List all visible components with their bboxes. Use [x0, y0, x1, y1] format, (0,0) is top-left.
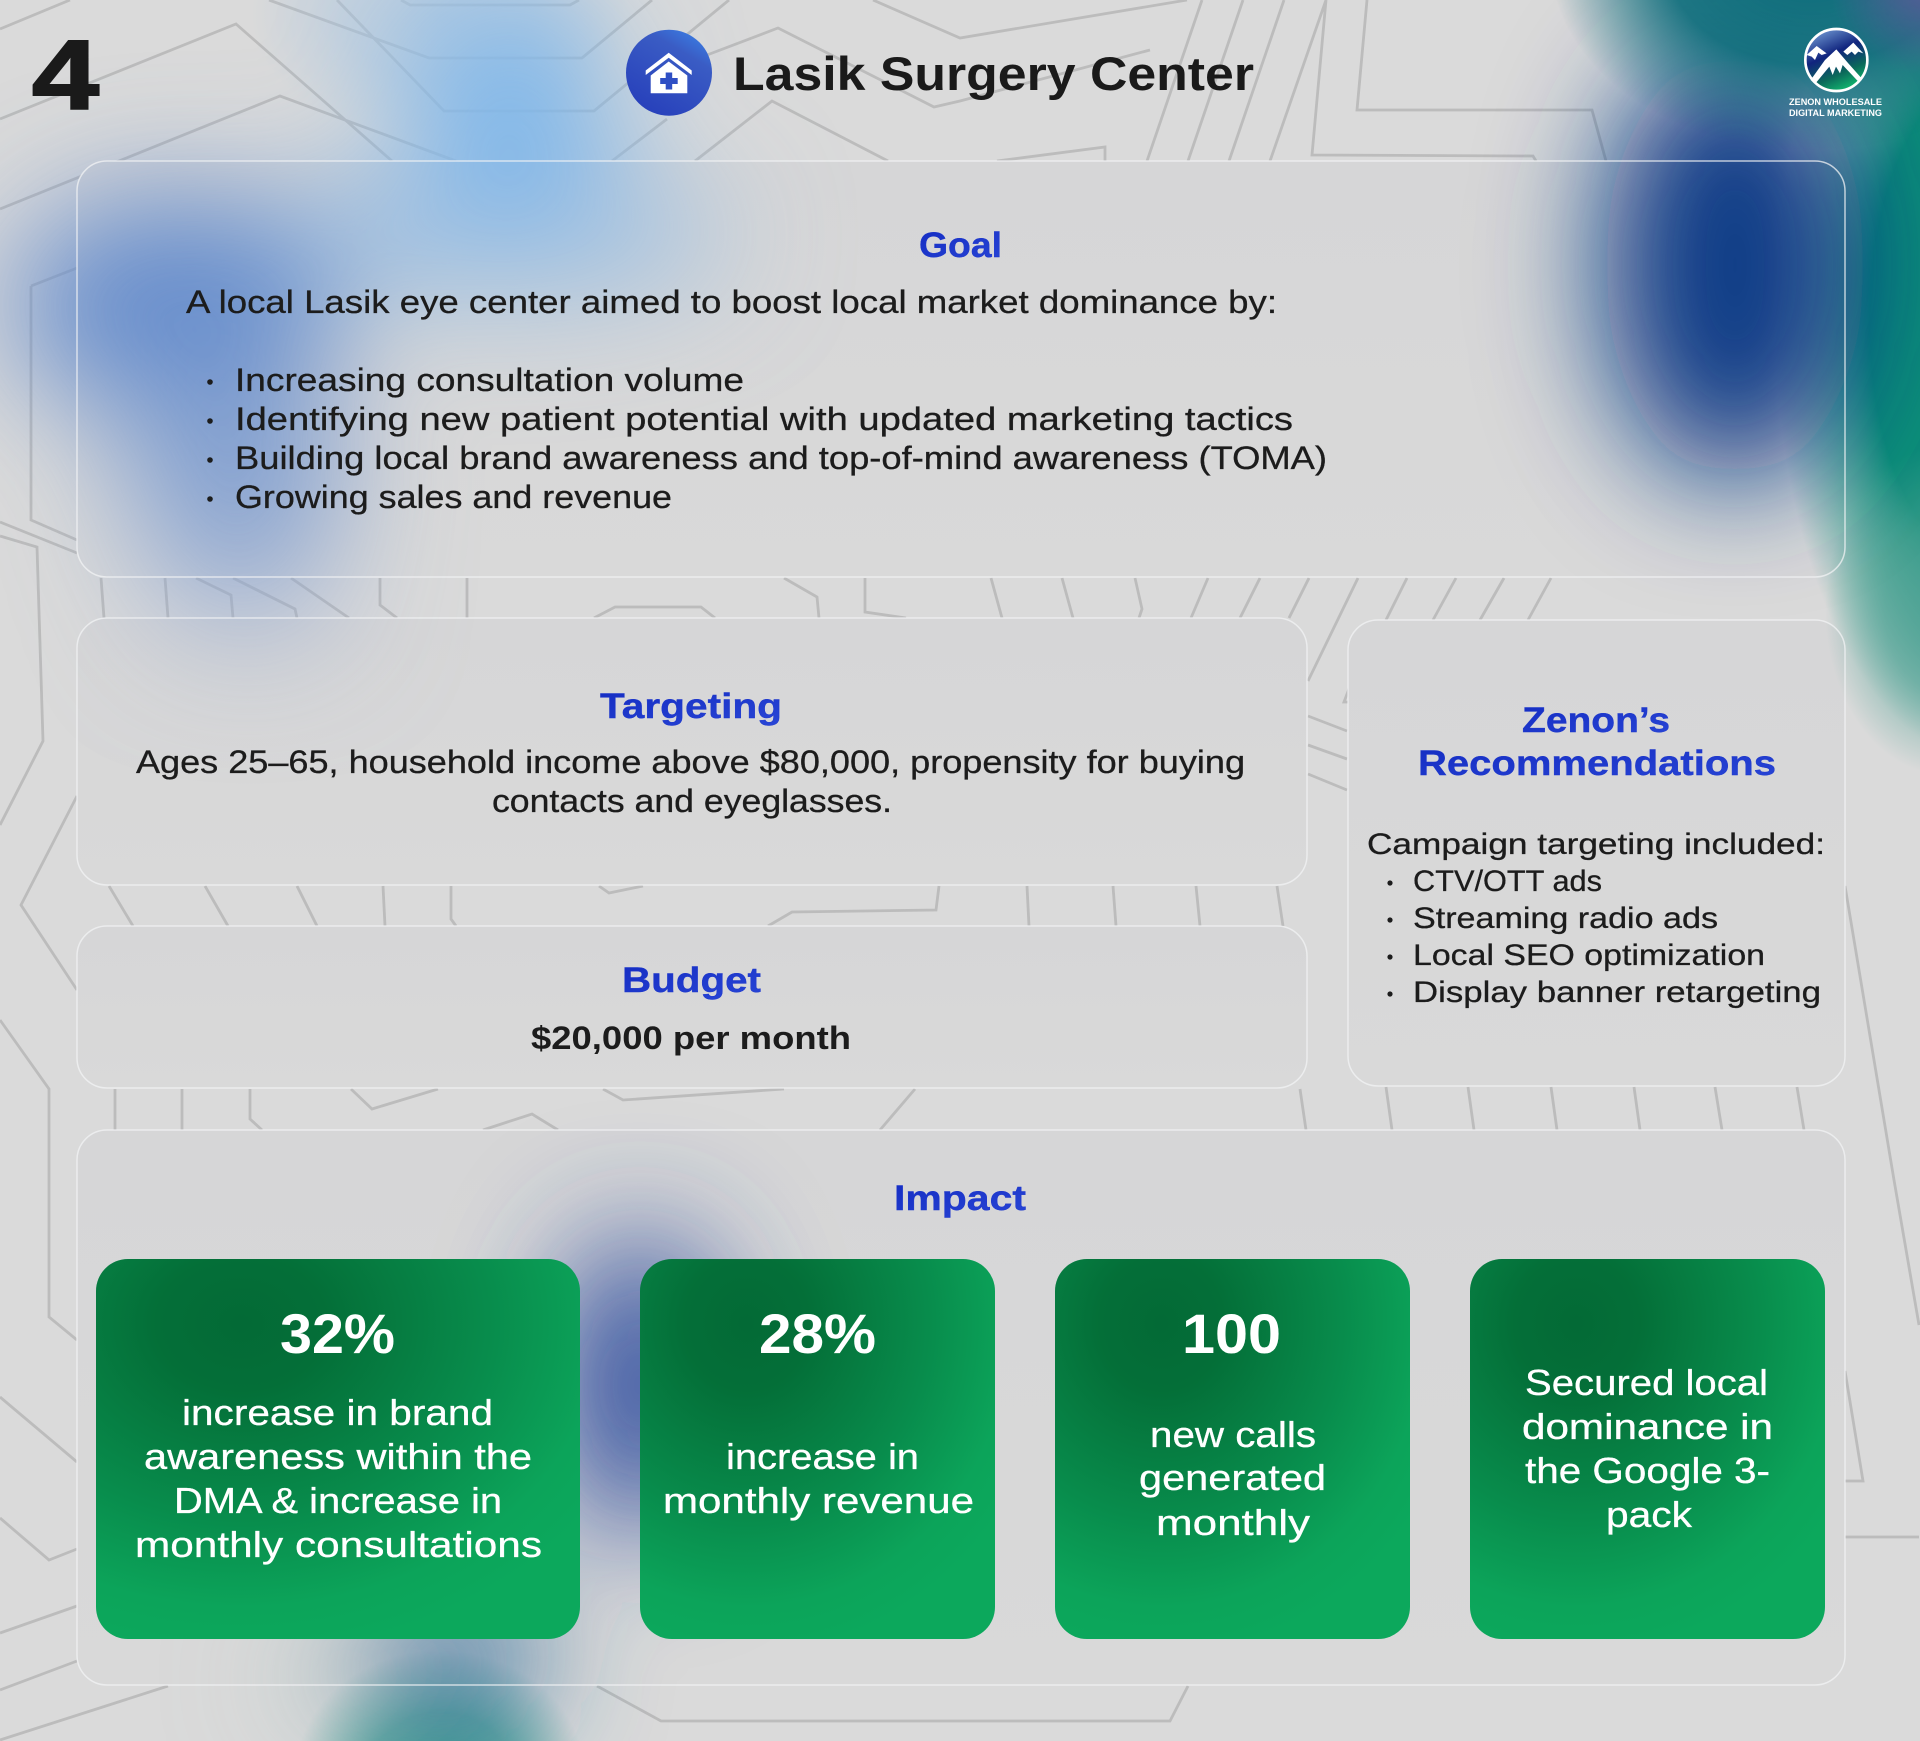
panel: Zenon's recommendations: [1348, 620, 1845, 1086]
card: 100 new calls: generated: [1139, 1457, 1326, 1498]
card: 100 new calls: [1055, 1259, 1410, 1639]
panel: goal: [77, 161, 1845, 577]
header: icon and title: [626, 30, 1254, 116]
card: Google 3-pack: dominance in: [1522, 1406, 1773, 1447]
card: Google 3-pack: Secured local: [1525, 1362, 1768, 1403]
heading: budget: Budget: [622, 961, 761, 1000]
card: 28% monthly revenue: increase in: [726, 1436, 919, 1477]
text: targeting description: contacts and eyeglasses.: [492, 783, 892, 819]
logo: Zenon Wholesale Digital Marketing: DIGITAL MARKETING: [1789, 108, 1882, 119]
card: 28% monthly revenue: monthly revenue: [663, 1480, 974, 1521]
card: 32% brand awareness: monthly consultations: [135, 1524, 542, 1565]
list: campaign channels: Streaming radio ads: [1413, 902, 1718, 935]
card: 32% brand awareness: DMA & increase in: [174, 1480, 502, 1521]
list: campaign channels: Local SEO optimization: [1413, 939, 1765, 972]
title: Lasik Surgery Center: [733, 47, 1254, 100]
list: goal bullets: [207, 362, 1327, 515]
list: goal bullets: Growing sales and revenue: [235, 479, 672, 515]
card: 28% monthly revenue: [640, 1259, 995, 1639]
text: campaign intro: Campaign targeting included:: [1367, 828, 1825, 861]
big step number: 4: [32, 20, 99, 130]
text: targeting description: [136, 744, 1245, 819]
card: 32% brand awareness: awareness within the: [144, 1436, 532, 1477]
icon: medical house: [626, 30, 712, 116]
heading: Zenon's recommendations: Recommendations: [1418, 744, 1776, 783]
list: goal bullets: Building local brand awareness and top-of-mind awareness (TOMA): [235, 440, 1327, 476]
text: goal intro: A local Lasik eye center aimed to boost local market dominance by:: [186, 284, 1277, 320]
list: campaign channels: [1387, 865, 1821, 1009]
card: 32% brand awareness: 32%: [280, 1302, 395, 1365]
heading: goal: Goal: [919, 226, 1002, 265]
card: 100 new calls: new calls: [1150, 1414, 1316, 1455]
card: 100 new calls: monthly: [1156, 1502, 1310, 1543]
list: goal bullets: Identifying new patient potential with updated marketing tactics: [235, 401, 1293, 437]
card: 32% brand awareness: [96, 1259, 580, 1639]
panel: targeting: [77, 618, 1307, 885]
card: Google 3-pack: pack: [1606, 1494, 1693, 1535]
logo: Zenon Wholesale Digital Marketing: [1789, 29, 1882, 119]
list: goal bullets: Increasing consultation volume: [235, 362, 744, 398]
text: budget amount: $20,000 per month: [531, 1020, 851, 1056]
text: targeting description: Ages 25–65, household income above $80,000, propensity for buying: [136, 744, 1245, 780]
list: campaign channels: CTV/OTT ads: [1413, 865, 1602, 898]
card: 100 new calls: 100: [1182, 1302, 1281, 1365]
heading: targeting: Targeting: [600, 687, 782, 726]
card: Google 3-pack: [1470, 1259, 1825, 1639]
heading: Zenon's recommendations: [1418, 701, 1776, 783]
card: 32% brand awareness: increase in brand: [182, 1392, 493, 1433]
logo: Zenon Wholesale Digital Marketing: ZENON WHOLESALE: [1789, 97, 1882, 108]
card: 28% monthly revenue: 28%: [759, 1302, 876, 1365]
heading: impact: Impact: [894, 1179, 1026, 1218]
panel: budget: [77, 926, 1307, 1088]
card: Google 3-pack: the Google 3-: [1525, 1450, 1770, 1491]
list: campaign channels: Display banner retargeting: [1413, 976, 1821, 1009]
panel: impact: [77, 1130, 1845, 1685]
heading: Zenon's recommendations: Zenon’s: [1522, 701, 1670, 740]
